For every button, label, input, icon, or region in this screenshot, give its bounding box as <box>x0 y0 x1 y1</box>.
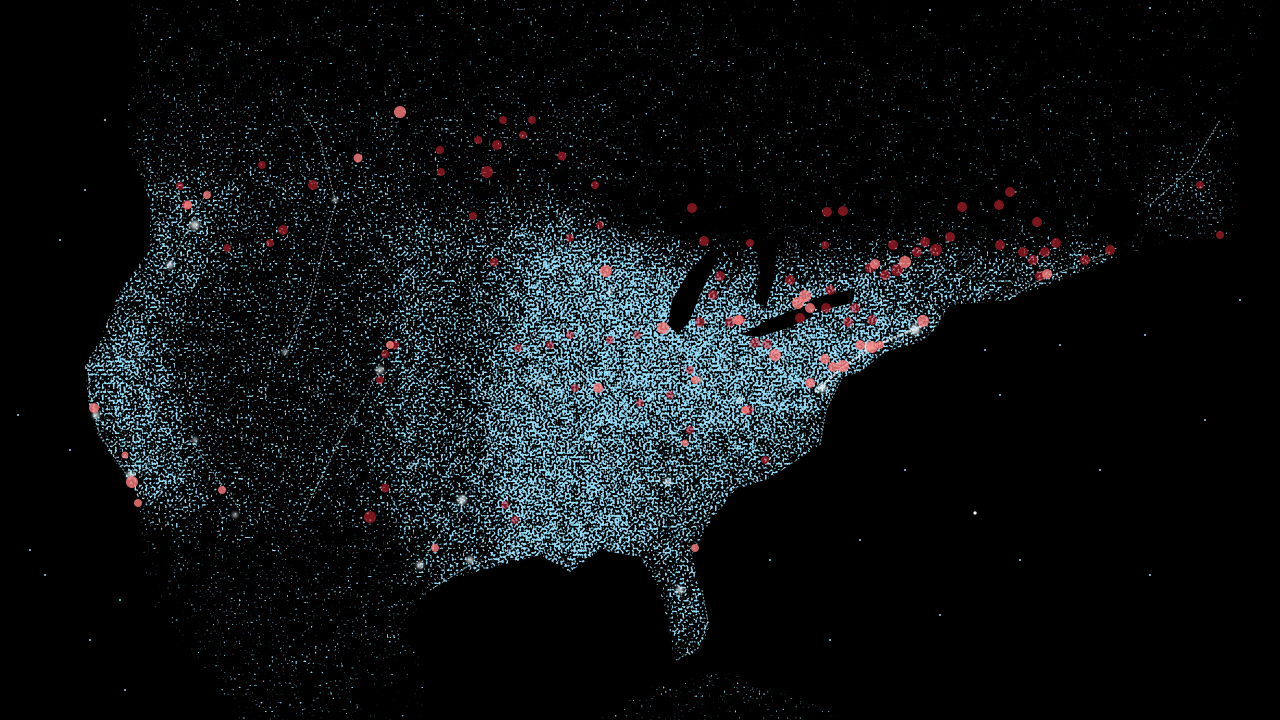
dark red markers <box>176 116 1224 524</box>
city glows <box>92 198 920 594</box>
northeast corridor highlight <box>815 325 925 392</box>
road and coast highlights <box>88 105 1220 660</box>
bright salmon markers <box>89 106 1052 552</box>
